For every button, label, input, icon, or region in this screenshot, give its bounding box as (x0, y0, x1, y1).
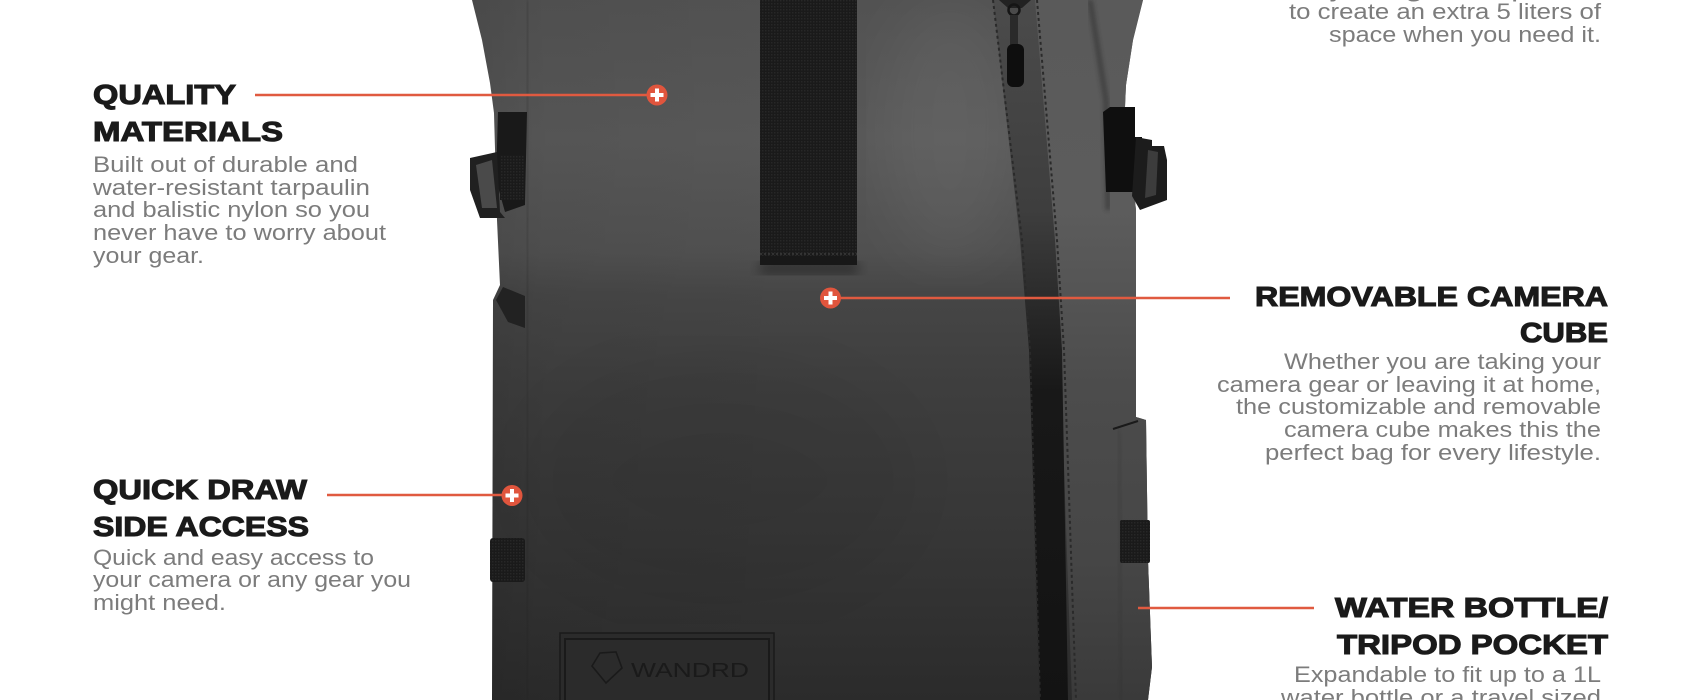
heading (93, 79, 283, 147)
heading: REMOVABLE CAMERA (1255, 281, 1608, 312)
icon: plus marker (502, 485, 522, 506)
heading (1255, 281, 1608, 348)
patch wordmark: WANDRD (631, 660, 749, 682)
left compression strap and buckle (470, 112, 527, 218)
description: might need. (93, 590, 226, 615)
heading: QUICK DRAW (93, 474, 308, 505)
center webbing strap (760, 0, 858, 274)
description: Built out of durable and (93, 152, 358, 177)
callout: quality materials (92, 79, 667, 268)
zipper pull (999, 0, 1031, 87)
leader line (836, 297, 1230, 299)
description (1217, 349, 1602, 465)
callout: removable camera cube (820, 281, 1608, 465)
heading (93, 474, 309, 542)
zipper channel (993, 0, 1076, 700)
heading: SIDE ACCESS (93, 511, 309, 542)
icon: hexagon logo (592, 652, 622, 683)
description: and balistic nylon so you (93, 197, 370, 222)
heading (1335, 592, 1608, 660)
left lower strap (490, 538, 525, 582)
right compression strap and buckle (1103, 107, 1167, 210)
description: your gear. (93, 243, 204, 268)
heading: MATERIALS (93, 116, 283, 147)
description: perfect bag for every lifestyle. (1265, 440, 1601, 465)
description: water-resistant tarpaulin (92, 175, 370, 200)
leader line (255, 94, 650, 96)
description (1280, 662, 1601, 700)
heading: TRIPOD POCKET (1337, 629, 1608, 660)
backpack photo (460, 0, 1167, 700)
heading: WATER BOTTLE/ (1335, 592, 1608, 623)
description: Whether you are taking your (1284, 349, 1602, 374)
description: camera gear or leaving it at home, (1217, 372, 1601, 397)
description: camera cube makes this the (1284, 417, 1601, 442)
description: the customizable and removable (1236, 394, 1601, 419)
description: never have to worry about (93, 220, 387, 245)
bag body (460, 0, 1160, 700)
callout: water bottle tripod pocket (1138, 592, 1608, 700)
left pocket elastic (496, 287, 525, 328)
description: Quick and easy access to (93, 545, 374, 570)
callout: expandable roll top text (1289, 0, 1602, 47)
description: your camera or any gear you (93, 567, 411, 592)
callout: expandable roll top text: space when you need it. (1329, 22, 1601, 47)
description: Expandable to fit up to a 1L (1294, 662, 1601, 687)
right lower strap (1120, 520, 1150, 563)
heading: QUALITY (93, 79, 236, 110)
heading: CUBE (1520, 317, 1608, 348)
description (93, 545, 411, 615)
leader line (327, 494, 506, 496)
icon: plus marker (820, 288, 841, 308)
description (92, 152, 387, 268)
logo patch (560, 633, 774, 700)
callout: quick draw side access (93, 474, 522, 615)
leader line (1138, 607, 1314, 609)
icon: plus marker (646, 84, 668, 106)
